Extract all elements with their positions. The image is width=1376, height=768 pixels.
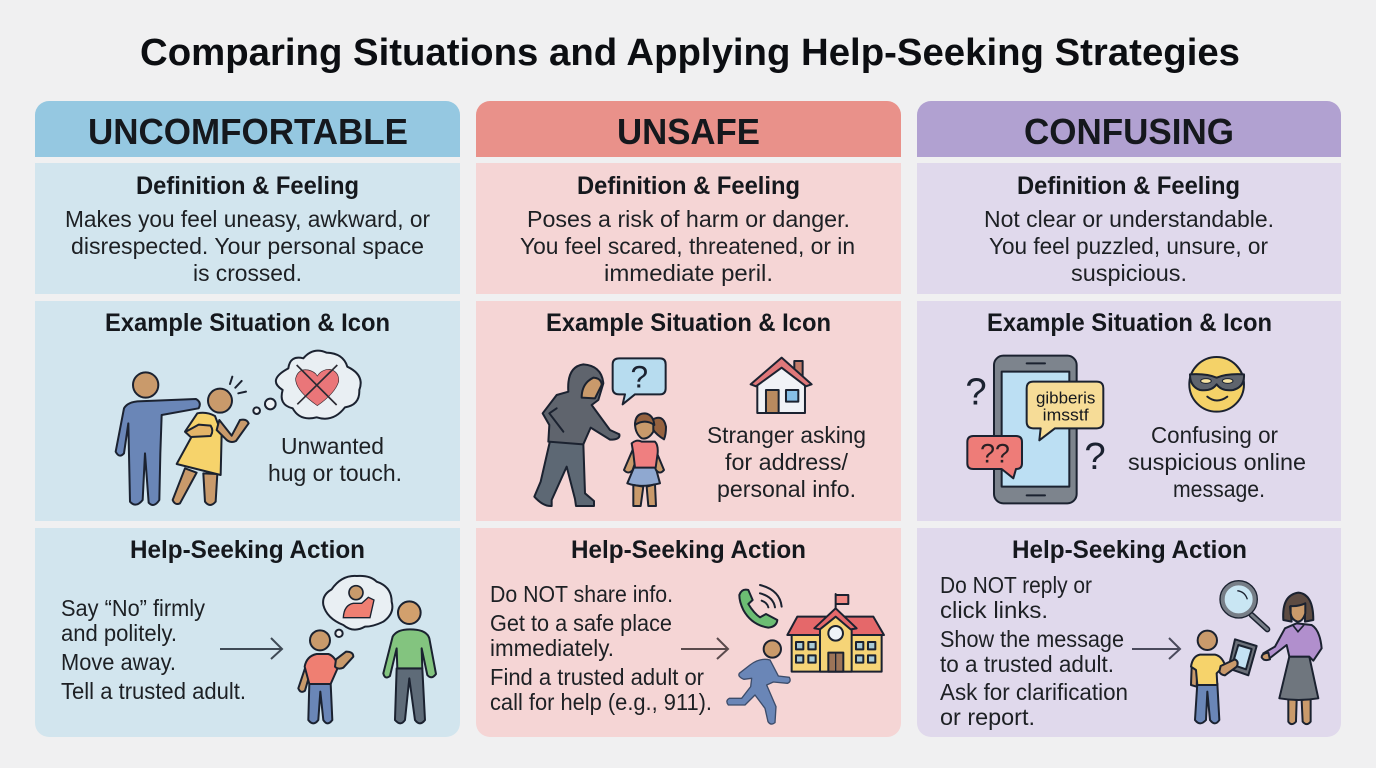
- section: example situation: [35, 301, 460, 521]
- icon: phone with confusing messages: [965, 356, 1106, 503]
- section: help-seeking action: Help-Seeking Action: [1012, 536, 1247, 564]
- section: help-seeking action: Do NOT share info.: [490, 581, 673, 607]
- header: uncomfortable: UNCOMFORTABLE: [88, 111, 408, 152]
- section: example situation: [476, 301, 901, 521]
- section: help-seeking action: or report.: [940, 704, 1035, 730]
- section: help-seeking action: Help-Seeking Action: [130, 536, 365, 564]
- icon: house: [751, 358, 812, 413]
- caption: unwanted hug: [268, 433, 402, 486]
- caption: stranger asking: [707, 422, 866, 502]
- section: definition and feeling: You feel puzzled, unsure, or: [989, 233, 1268, 259]
- caption: stranger asking: Stranger asking: [707, 422, 866, 448]
- icon: child showing tablet to adult with magnifying glass: [1191, 581, 1322, 724]
- caption: stranger asking: for address/: [725, 449, 849, 475]
- icon: phone with confusing messages: ?: [1084, 435, 1106, 478]
- icon: phone, running child and school: [727, 585, 884, 724]
- caption: confusing message: suspicious online: [1128, 449, 1306, 475]
- caption: unwanted hug: Unwanted: [281, 433, 384, 459]
- arrow: [1132, 638, 1180, 659]
- panel: uncomfortable: [35, 101, 460, 737]
- icon: phone with confusing messages: imsstf: [1043, 405, 1089, 424]
- icon: man reaching toward girl with crossed heart thought: [116, 351, 361, 505]
- header: confusing: [917, 101, 1341, 157]
- section: example situation: Example Situation & Icon: [546, 309, 831, 337]
- header: uncomfortable: [35, 101, 460, 157]
- section: help-seeking action: Get to a safe place: [490, 610, 672, 636]
- section: definition and feeling: [917, 163, 1341, 294]
- section: definition and feeling: You feel scared, threatened, or in: [520, 233, 855, 259]
- section: example situation: Example Situation & Icon: [105, 309, 390, 337]
- icon: phone with confusing messages: ?: [965, 370, 987, 413]
- icon: phone with confusing messages: gibberis: [1036, 388, 1095, 407]
- arrow: [681, 638, 728, 659]
- caption: stranger asking: personal info.: [717, 476, 856, 502]
- section: help-seeking action: to a trusted adult.: [940, 651, 1114, 677]
- header: unsafe: [476, 101, 901, 157]
- section: help-seeking action: Tell a trusted adult.: [61, 678, 246, 704]
- icon: hooded stranger approaching child: ?: [631, 359, 648, 395]
- section: definition and feeling: [35, 163, 460, 294]
- section: definition and feeling: Definition & Feeling: [1017, 172, 1240, 200]
- section: definition and feeling: is crossed.: [193, 260, 302, 286]
- section: help-seeking action: Say “No” firmly: [61, 595, 205, 621]
- panel: confusing: [917, 101, 1341, 737]
- section: definition and feeling: suspicious.: [1071, 260, 1187, 286]
- header: unsafe: UNSAFE: [617, 111, 760, 152]
- section: help-seeking action: and politely.: [61, 620, 177, 646]
- section: definition and feeling: [476, 163, 901, 294]
- caption: confusing message: Confusing or: [1151, 422, 1278, 448]
- section: definition and feeling: Definition & Feeling: [136, 172, 359, 200]
- section: help-seeking action: Find a trusted adult or: [490, 664, 704, 690]
- section: definition and feeling: Makes you feel uneasy, awkward, or: [65, 206, 430, 232]
- arrow: [220, 638, 282, 659]
- section: help-seeking action: [476, 528, 901, 737]
- icon: phone with confusing messages: ??: [980, 438, 1010, 468]
- icon: child telling a trusted adult: [298, 576, 436, 723]
- caption: unwanted hug: hug or touch.: [268, 460, 402, 486]
- title: Comparing Situations and Applying Help-Seeking Strategies: [140, 32, 1240, 74]
- section: definition and feeling: disrespected. Your personal space: [71, 233, 424, 259]
- section: help-seeking action: Help-Seeking Action: [571, 536, 806, 564]
- section: definition and feeling: immediate peril.: [604, 260, 773, 286]
- section: definition and feeling: Not clear or understandable.: [984, 206, 1274, 232]
- section: help-seeking action: Show the message: [940, 626, 1124, 652]
- section: definition and feeling: Definition & Feeling: [577, 172, 800, 200]
- header: confusing: CONFUSING: [1024, 111, 1234, 152]
- section: help-seeking action: click links.: [940, 597, 1048, 623]
- section: example situation: Example Situation & Icon: [987, 309, 1272, 337]
- caption: confusing message: [1128, 422, 1306, 502]
- section: help-seeking action: immediately.: [490, 635, 614, 661]
- section: help-seeking action: [917, 528, 1341, 737]
- icon: hooded stranger approaching child: [534, 358, 666, 506]
- section: help-seeking action: Ask for clarification: [940, 679, 1128, 705]
- section: help-seeking action: [35, 528, 460, 737]
- section: help-seeking action: Do NOT reply or: [940, 572, 1092, 598]
- panel: unsafe: [476, 101, 901, 737]
- caption: confusing message: message.: [1173, 476, 1265, 502]
- section: help-seeking action: Move away.: [61, 649, 176, 675]
- section: example situation: [917, 301, 1341, 521]
- icon: masked face: [1189, 357, 1244, 412]
- section: help-seeking action: call for help (e.g., 911).: [490, 689, 712, 715]
- section: definition and feeling: Poses a risk of harm or danger.: [527, 206, 850, 232]
